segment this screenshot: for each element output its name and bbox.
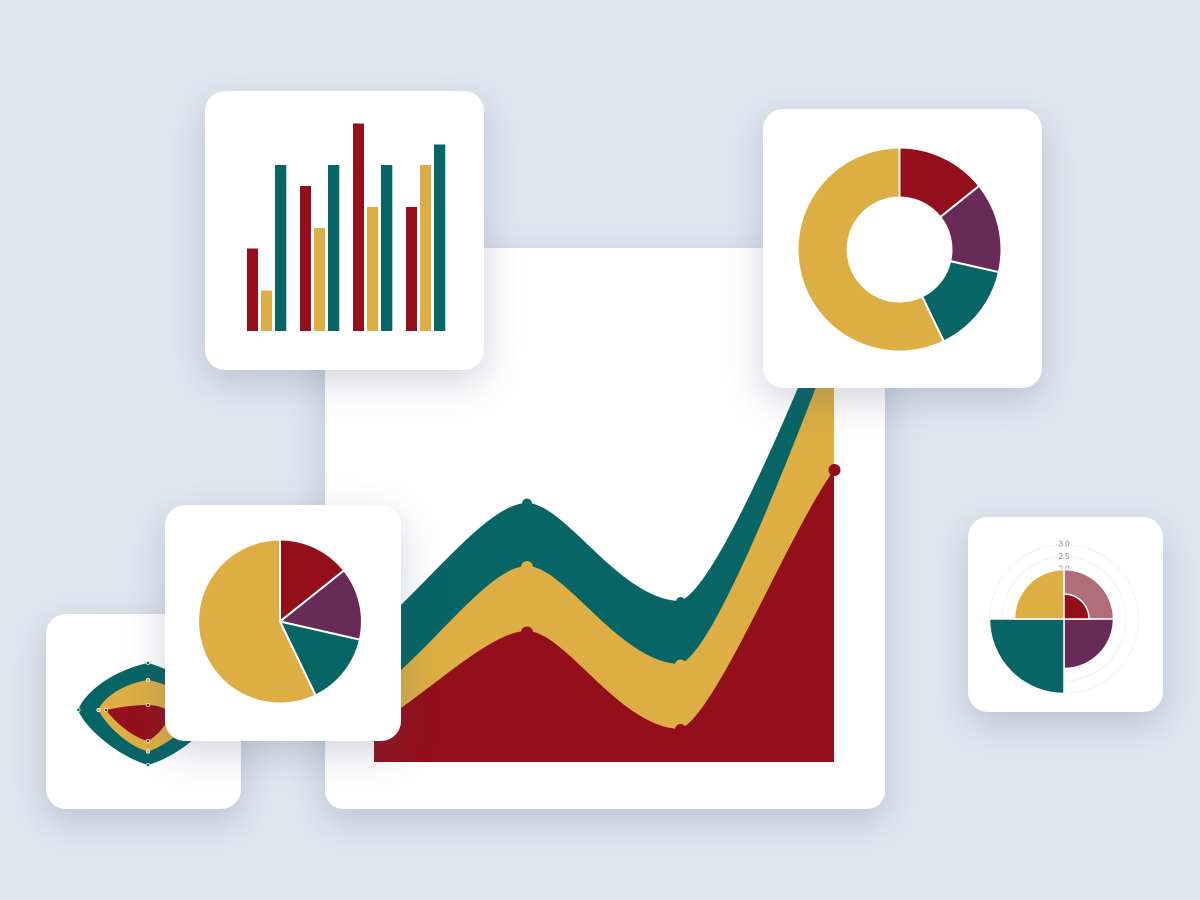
area series: teal	[374, 300, 834, 762]
doughnut chart	[798, 148, 1001, 352]
polar segments	[990, 570, 1114, 694]
area series: red	[374, 464, 840, 762]
panel: polar area chart card	[968, 517, 1163, 712]
polar scale labels: 3.0	[1058, 540, 1070, 548]
polar scale labels: 2.5	[1058, 552, 1070, 561]
panel: pie chart card	[165, 505, 401, 741]
polar scale labels: 2.0	[1058, 564, 1070, 574]
bar group 3	[353, 124, 392, 331]
radar series: red	[104, 703, 171, 743]
bar group 2	[300, 165, 339, 331]
bar group 4	[406, 144, 445, 331]
bar group 1	[247, 165, 286, 331]
radar series: teal	[77, 661, 216, 767]
panel: doughnut chart card	[763, 109, 1042, 388]
area series: yellow	[374, 340, 834, 762]
panel: radar chart card	[46, 614, 241, 809]
radar series: yellow	[97, 678, 205, 753]
polar scale labels	[1058, 539, 1070, 574]
panel: main area chart	[325, 248, 885, 809]
polar grid rings	[990, 544, 1138, 694]
pie chart	[198, 540, 362, 704]
panel: bar chart card	[205, 91, 484, 370]
